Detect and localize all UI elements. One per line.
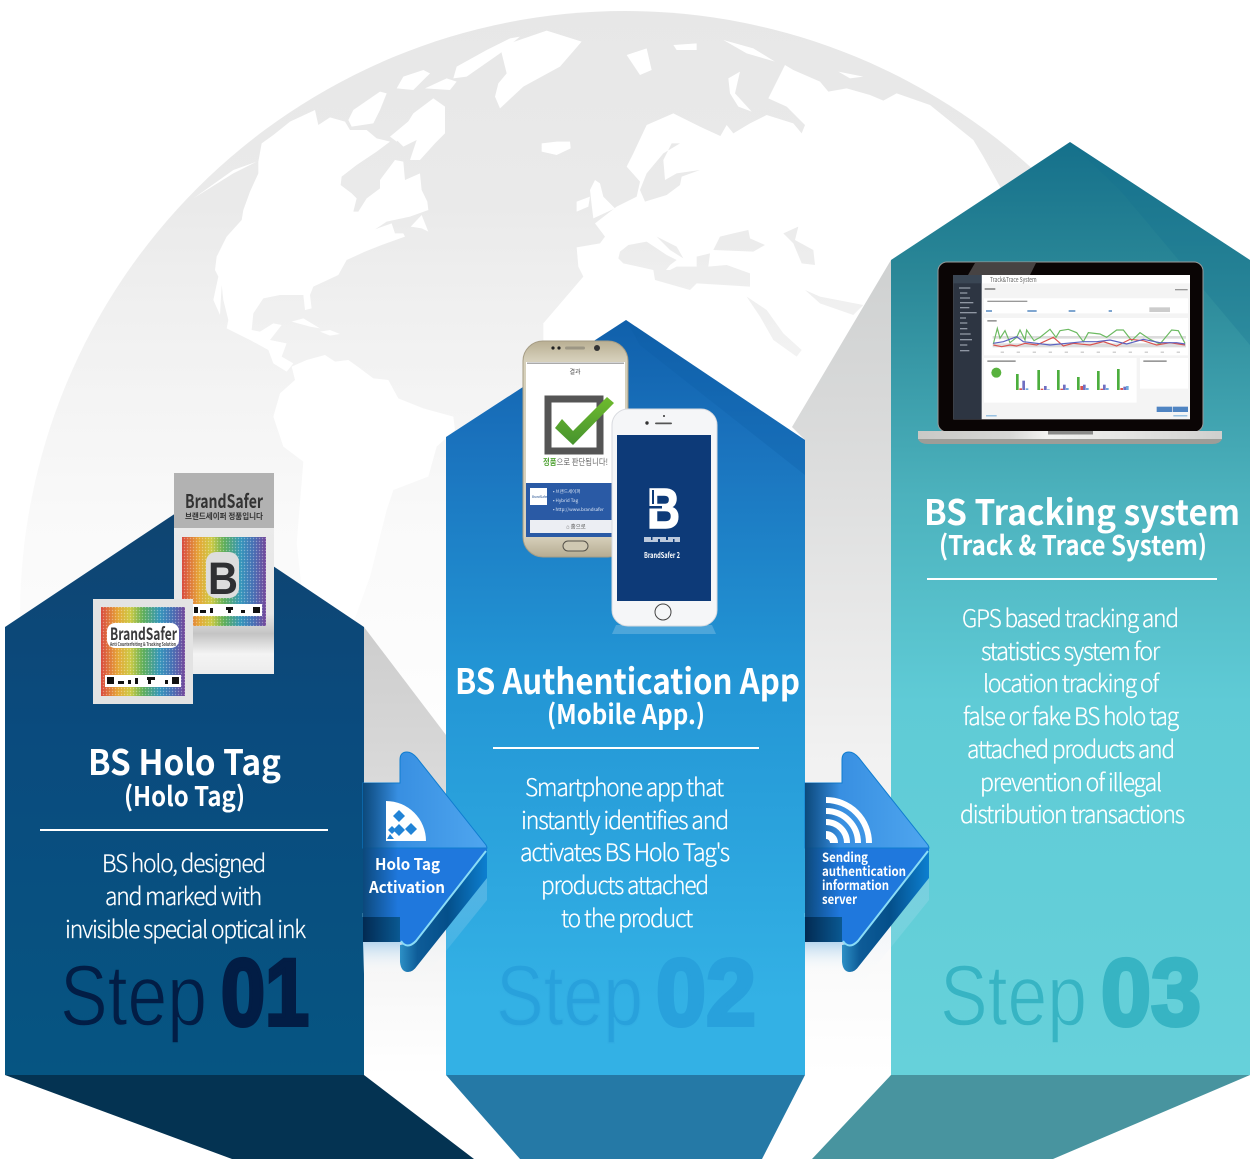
icon: signal waves bbox=[826, 800, 869, 843]
description: Smartphone app that bbox=[525, 768, 725, 803]
tag: back label: 브랜드세이퍼 정품입니다 bbox=[185, 511, 264, 522]
product info band: • http://www.brandsafer bbox=[553, 506, 604, 513]
land: Europe, Asia and Africa bbox=[495, 30, 1000, 438]
step number bbox=[940, 940, 1201, 1046]
description: location tracking of bbox=[983, 664, 1160, 699]
description: prevention of illegal bbox=[980, 763, 1162, 798]
description: products attached bbox=[541, 866, 708, 901]
sub heading: (Mobile App.) bbox=[547, 693, 705, 732]
iphone bbox=[612, 409, 717, 634]
laptop base bbox=[918, 431, 1222, 444]
step number: Step bbox=[60, 948, 207, 1044]
product info band: • 브랜드세이퍼 bbox=[553, 488, 580, 495]
sub heading: (Track & Trace System) bbox=[939, 524, 1207, 563]
step number: 02 bbox=[656, 940, 756, 1046]
panel: step 2 BS Authentication App bbox=[446, 320, 805, 1159]
land: the Americas and Arctic bbox=[196, 36, 520, 466]
dashboard screen: Track&Trace System bbox=[990, 274, 1037, 284]
step number bbox=[60, 940, 309, 1046]
description: GPS based tracking and bbox=[962, 599, 1178, 634]
app logo: B bbox=[647, 477, 680, 541]
globe background bbox=[40, 11, 1031, 466]
heading: BS Holo Tag bbox=[88, 735, 281, 786]
base of step 1 bbox=[5, 1075, 474, 1159]
arrow label: server bbox=[822, 889, 857, 908]
description: false or fake BS holo tag bbox=[963, 697, 1179, 732]
samsung phone bbox=[523, 341, 628, 557]
screen status bar bbox=[527, 362, 624, 364]
description: activates BS Holo Tag's bbox=[520, 833, 729, 868]
product info band: ⌂ 홈으로 bbox=[566, 522, 586, 530]
description: and marked with bbox=[105, 877, 261, 912]
description: to the product bbox=[561, 899, 694, 934]
step number: 03 bbox=[1101, 940, 1201, 1046]
step number: 01 bbox=[221, 940, 309, 1046]
description: statistics system for bbox=[981, 632, 1161, 667]
tag: front label bbox=[93, 599, 193, 704]
tag: back label: BrandSafer bbox=[185, 487, 264, 514]
seas bbox=[618, 143, 863, 357]
holo tag labels bbox=[93, 473, 274, 704]
description bbox=[65, 844, 307, 945]
tag: front label: Anti Counterfeiting & Tracking Solution bbox=[109, 641, 176, 648]
laptop with tracking dashboard bbox=[918, 262, 1222, 444]
base of step 2 bbox=[446, 1075, 805, 1159]
arrow label: authentication bbox=[822, 861, 906, 880]
description: instantly identifies and bbox=[521, 801, 728, 836]
check mark box bbox=[548, 397, 614, 451]
step number: Step bbox=[496, 948, 643, 1044]
arrow label: Holo Tag bbox=[375, 851, 440, 875]
icon: hologram quarter disc bbox=[386, 801, 426, 841]
description bbox=[960, 599, 1184, 830]
step number bbox=[496, 940, 756, 1046]
tag: front label: BrandSafer bbox=[110, 620, 177, 645]
app logo: BrandSafer 2 bbox=[644, 550, 680, 561]
tag: back label bbox=[174, 473, 274, 674]
description bbox=[520, 768, 729, 934]
tag: back label: B bbox=[208, 553, 238, 604]
arrow: holo tag activation bbox=[362, 752, 487, 994]
app logo bbox=[644, 477, 680, 561]
samsung phone: 결과 bbox=[569, 367, 581, 376]
dashboard screen bbox=[953, 274, 1190, 419]
arrow label: information bbox=[822, 875, 889, 894]
description: BS holo, designed bbox=[102, 844, 265, 879]
arrow label: Activation bbox=[368, 874, 445, 898]
step number: Step bbox=[940, 948, 1087, 1044]
arrow: sending authentication information bbox=[804, 752, 929, 994]
description: attached products and bbox=[967, 730, 1174, 765]
description: distribution transactions bbox=[960, 795, 1184, 830]
product info band bbox=[526, 483, 625, 537]
product info band: BrandSafer bbox=[532, 495, 549, 499]
heading: BS Authentication App bbox=[455, 654, 800, 705]
result message: 정품으로 판단됩니다! bbox=[543, 456, 608, 468]
product info band: • Hybrid Tag bbox=[553, 497, 579, 504]
arrow label bbox=[368, 851, 445, 898]
base of step 3 bbox=[812, 1075, 1250, 1159]
arrow label: Sending bbox=[822, 847, 868, 866]
panel: step 1 BS Holo Tag bbox=[5, 507, 474, 1159]
sub heading: (Holo Tag) bbox=[124, 775, 245, 814]
heading: BS Tracking system bbox=[924, 485, 1240, 536]
description: invisible special optical ink bbox=[65, 910, 307, 945]
panel: step 3 BS Tracking system bbox=[812, 142, 1250, 1159]
panel shadows bbox=[364, 260, 891, 1075]
arrow label bbox=[822, 847, 906, 908]
